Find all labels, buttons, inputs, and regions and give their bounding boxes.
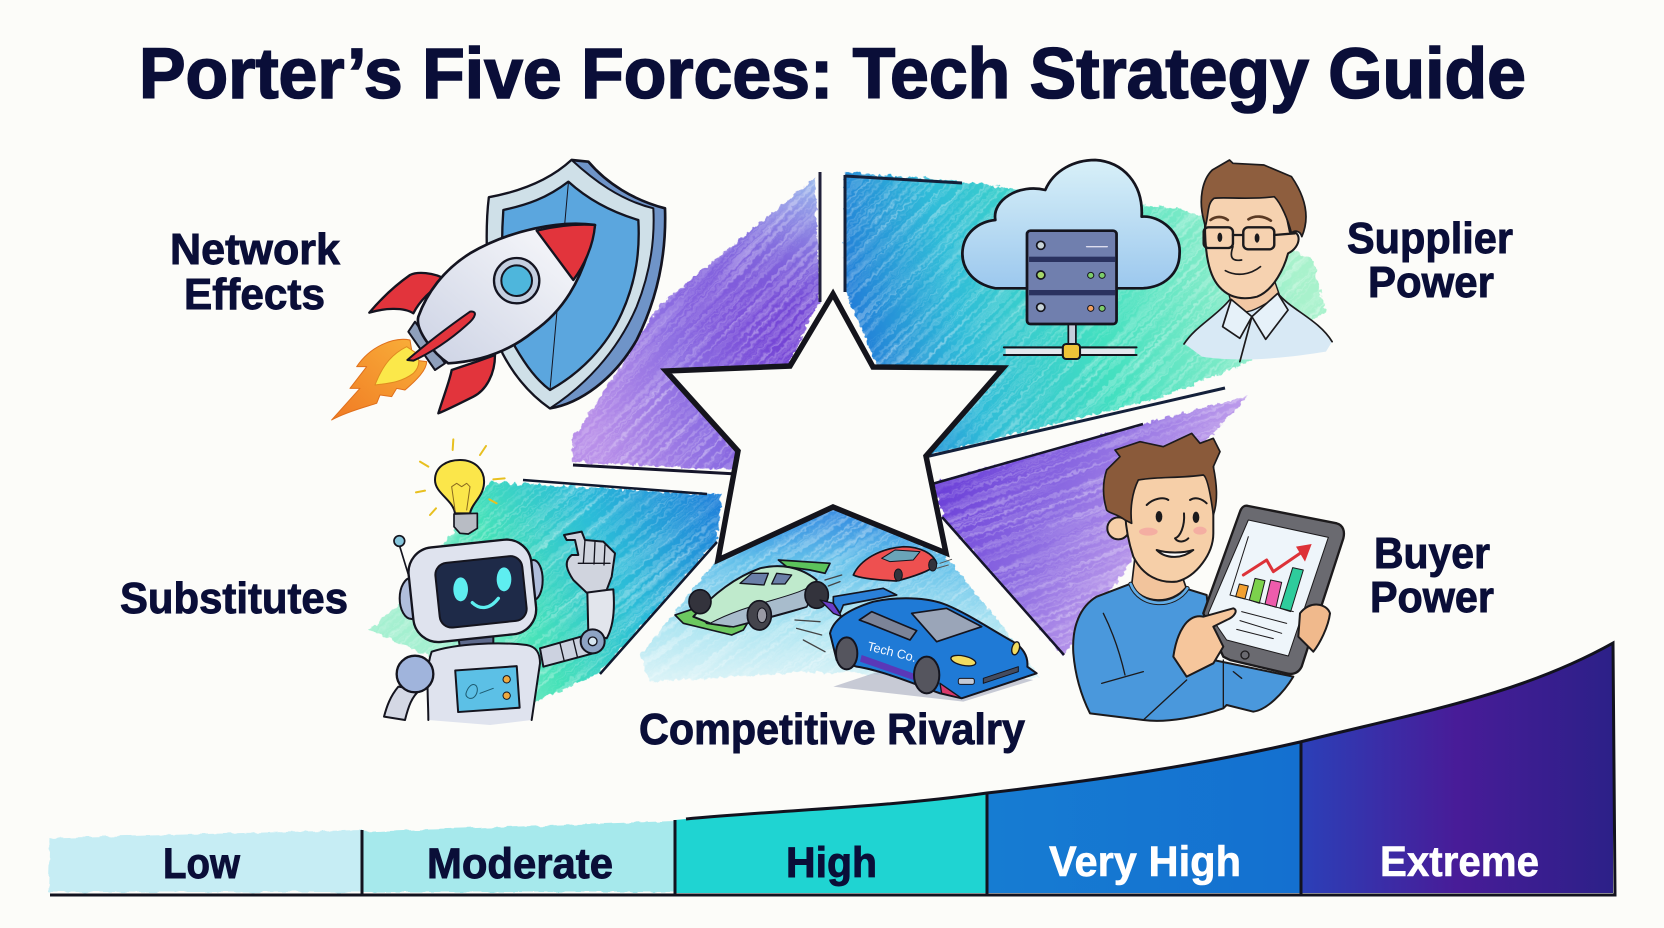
bar segment: high bbox=[675, 793, 987, 893]
car lettering: Tech Co. bbox=[866, 639, 918, 665]
sweater collar bbox=[1131, 584, 1187, 603]
label: network effects: Effects bbox=[184, 270, 325, 319]
robot left arm bbox=[384, 687, 420, 720]
label: buyer power: Buyer bbox=[1374, 529, 1490, 578]
right hand over tablet bbox=[1298, 605, 1330, 652]
collar bbox=[1223, 293, 1288, 339]
facial features bbox=[1147, 498, 1207, 557]
label: network effects bbox=[170, 225, 341, 319]
label: supplier power: Supplier bbox=[1347, 214, 1513, 263]
label: competitive rivalry: Competitive Rivalry bbox=[639, 705, 1025, 754]
title: Porter’s Five Forces: Tech Strategy Guide bbox=[139, 35, 1526, 114]
icon: cloud bbox=[962, 160, 1180, 288]
label: supplier power bbox=[1347, 214, 1513, 307]
icon: red car bbox=[853, 547, 952, 581]
robot antenna and ears bbox=[394, 536, 543, 619]
tablet trend arrow bbox=[1243, 553, 1300, 575]
bar segment: high: High bbox=[786, 839, 877, 887]
sweater seams bbox=[1102, 613, 1242, 720]
label: network effects: Network bbox=[170, 225, 341, 274]
ear and face bbox=[1107, 517, 1129, 539]
shirt bbox=[1184, 293, 1332, 362]
icon: server rack bbox=[1004, 231, 1137, 359]
panel: five force segments around star bbox=[261, 0, 1468, 876]
label: buyer power bbox=[1370, 529, 1494, 622]
icon: rocket and shield bbox=[332, 160, 665, 420]
neck bbox=[1226, 280, 1279, 312]
bar segment: low bbox=[48, 830, 362, 892]
icon: green race car bbox=[675, 560, 842, 652]
icon: rocket body bbox=[369, 224, 595, 413]
label: substitutes: Substitutes bbox=[120, 574, 348, 623]
icon: blue tech car bbox=[820, 588, 1037, 702]
icon: shield bbox=[487, 160, 665, 408]
icon: cloud server bbox=[962, 160, 1180, 359]
icon: tablet bbox=[1203, 506, 1344, 674]
label: buyer power: Power bbox=[1370, 573, 1494, 622]
icon: rocket flame bbox=[332, 339, 427, 420]
segment: rivalry light blue bbox=[558, 320, 1122, 870]
sweater bbox=[1073, 583, 1293, 721]
star outline bbox=[666, 294, 1003, 560]
pointing hand bbox=[1173, 608, 1236, 677]
segment: buyer power purple bbox=[848, 294, 1332, 758]
robot neck and body bbox=[397, 635, 540, 725]
face bbox=[1205, 190, 1299, 298]
hair bbox=[1201, 160, 1306, 237]
robot head bbox=[406, 537, 539, 645]
icon: supplier person bbox=[1184, 160, 1332, 362]
icon: robot with lightbulb bbox=[384, 439, 615, 725]
segment: network effects purple bbox=[426, 54, 966, 594]
icon: lightbulb bbox=[416, 439, 505, 534]
label: supplier power: Power bbox=[1368, 258, 1494, 307]
tablet chart bars bbox=[1236, 568, 1303, 612]
hair bbox=[1104, 433, 1220, 523]
glasses bbox=[1204, 227, 1295, 249]
bar segment: moderate: Moderate bbox=[427, 840, 613, 888]
segment: supplier power teal bbox=[703, 0, 1468, 696]
icon: buyer person with tablet bbox=[1073, 433, 1344, 721]
icon: racing cars bbox=[675, 547, 1037, 702]
bar segment: very high bbox=[987, 742, 1300, 893]
segment: substitutes teal bbox=[261, 309, 831, 876]
bar chart: intensity scale bbox=[48, 643, 1615, 895]
bar segment: low: Low bbox=[163, 840, 240, 888]
bar segment: moderate bbox=[362, 821, 675, 892]
eyes, brows, nose and mouth bbox=[1211, 217, 1271, 274]
neck bbox=[1132, 557, 1186, 600]
bar segment: extreme: Extreme bbox=[1380, 838, 1539, 886]
bar segment: very high: Very High bbox=[1049, 838, 1241, 886]
robot right arm and hand bbox=[540, 532, 615, 667]
bar segment: extreme bbox=[1300, 643, 1613, 893]
